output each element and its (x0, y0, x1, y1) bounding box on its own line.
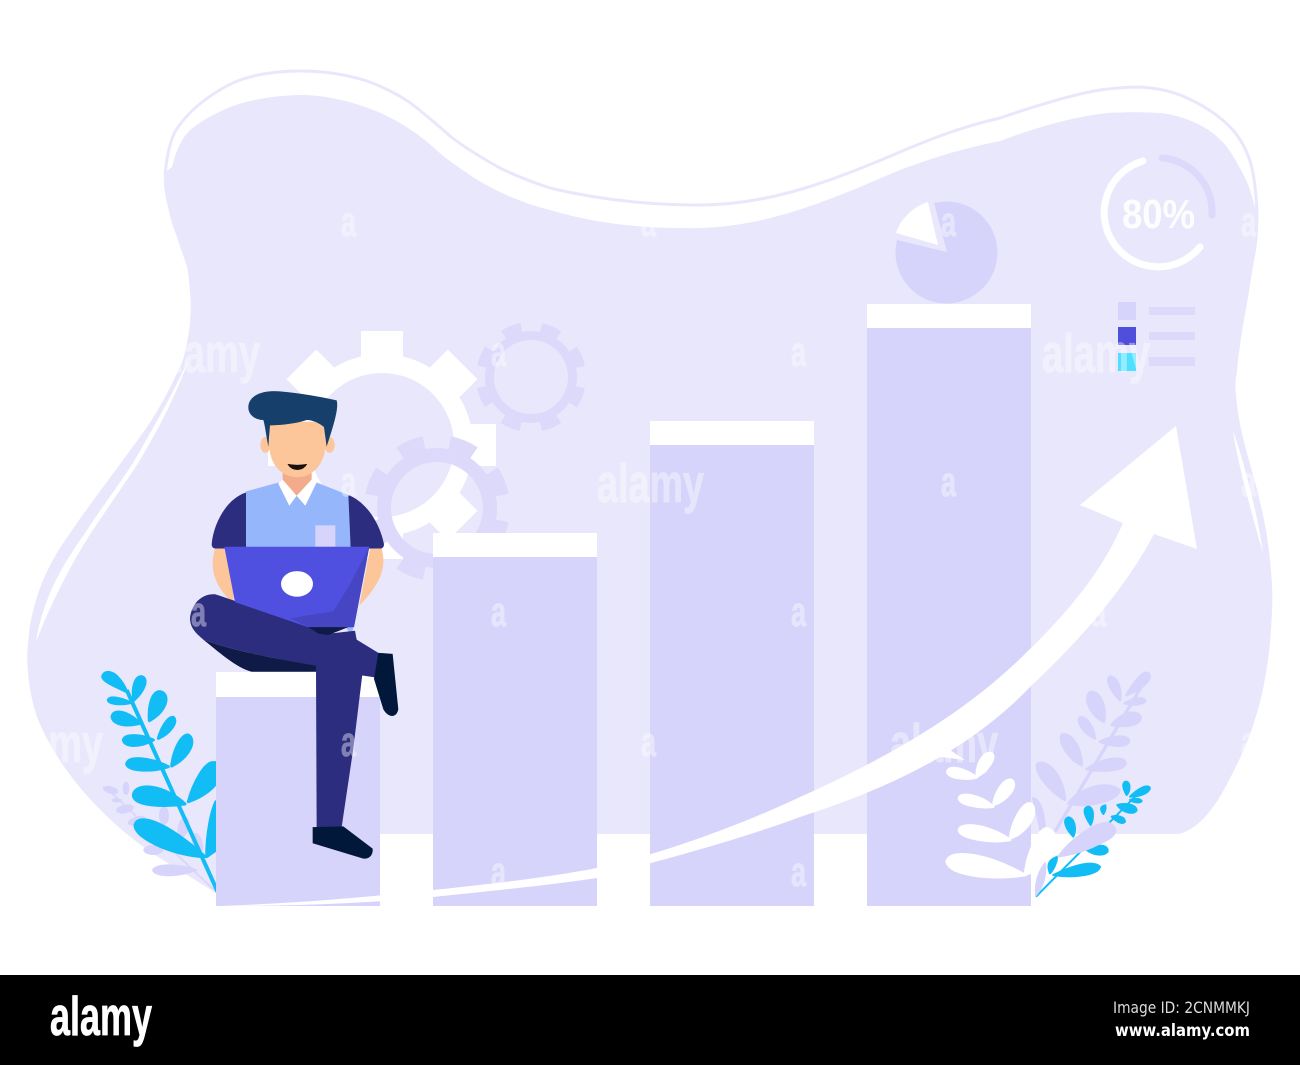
plant: blue right (1036, 782, 1150, 897)
leg shadow (203, 640, 316, 672)
watermarks: a (491, 588, 506, 635)
watermarks (0, 198, 1256, 895)
shirt tail (343, 624, 354, 636)
collar (278, 479, 317, 506)
watermarks: a (341, 718, 356, 765)
progress ring 80%: 80% (1122, 191, 1195, 237)
bar 2 (433, 533, 597, 906)
laptop (224, 547, 369, 628)
shadow under laptop (308, 627, 348, 635)
watermarks: a (1241, 198, 1256, 245)
plant: white right (947, 753, 1058, 877)
watermarks: alamy (1042, 322, 1150, 384)
bar 1 (216, 672, 380, 906)
image id: Image ID: 2CNMMKJ (1113, 998, 1250, 1017)
arms (213, 549, 383, 606)
ears (260, 437, 335, 453)
watermarks: alamy (890, 712, 998, 774)
man with laptop (190, 391, 398, 859)
bar 3 (650, 421, 814, 906)
plant: small purple left (102, 782, 216, 892)
watermarks: a (791, 328, 806, 375)
website: www.alamy.com (1115, 1021, 1250, 1041)
hair (248, 391, 337, 447)
watermarks: a (941, 458, 956, 505)
watermarks: a (491, 328, 506, 375)
watermarks: a (641, 198, 656, 245)
standing leg (316, 631, 363, 827)
lower foot (313, 826, 373, 859)
crossed leg (190, 594, 380, 678)
plant: purple right (1033, 673, 1150, 847)
pie chart (895, 201, 997, 303)
laptop shade (290, 547, 369, 628)
raised foot (374, 653, 398, 716)
watermarks: a (1241, 718, 1256, 765)
watermarks: a (791, 588, 806, 635)
bar 4 (867, 304, 1031, 906)
plant: blue left (103, 672, 218, 893)
plant: lavender overlay leaves (1036, 823, 1115, 895)
legend (1118, 302, 1195, 371)
watermarks: a (641, 718, 656, 765)
watermarks: alamy (152, 322, 260, 384)
watermarks: a (1091, 588, 1106, 635)
mouth (287, 464, 307, 470)
footer logo: alamy (50, 985, 152, 1047)
footer bar (0, 975, 1300, 1065)
pocket (315, 525, 335, 547)
watermarks: a (791, 848, 806, 895)
watermarks: a (491, 848, 506, 895)
watermarks: alamy (597, 452, 704, 514)
progress ring 80% (1104, 158, 1212, 267)
face (269, 422, 325, 477)
watermarks: a (191, 588, 206, 635)
watermarks: a (1241, 458, 1256, 505)
sleeves (212, 492, 384, 549)
gear: top right (472, 318, 590, 436)
watermarks: a (341, 198, 356, 245)
watermarks: a (941, 198, 956, 245)
neck (283, 468, 312, 497)
gear: large white (268, 331, 496, 559)
growth arrow (220, 426, 1197, 906)
background blob (27, 71, 1272, 893)
watermarks: a (341, 458, 356, 505)
gear: middle (359, 430, 515, 586)
laptop logo (281, 571, 313, 597)
vest (246, 482, 351, 549)
